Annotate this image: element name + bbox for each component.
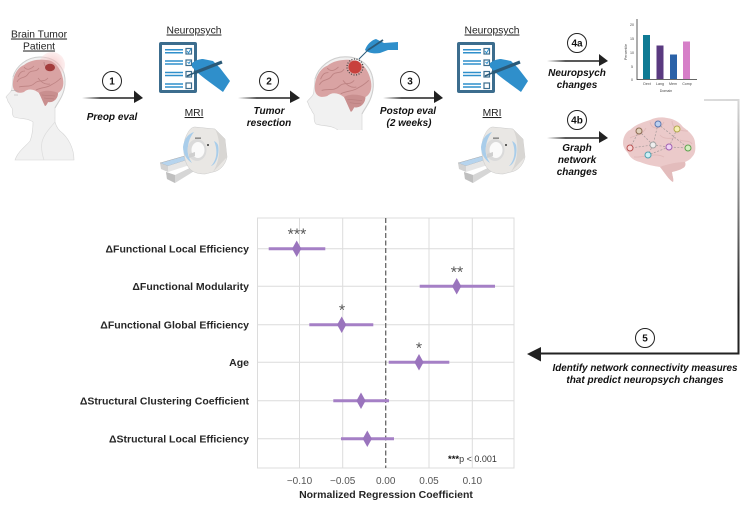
step 4b badge: 4b <box>571 116 583 126</box>
mini bar chart: neuropsych changes by domain: 15 <box>630 37 634 41</box>
heading: MRI postop: MRI <box>483 108 501 119</box>
mini bar chart: neuropsych changes by domain: Lang <box>656 82 664 86</box>
step 2 label: Tumor <box>254 106 286 117</box>
mini bar chart: neuropsych changes by domain: 5 <box>631 65 633 69</box>
zero reference line <box>385 218 387 468</box>
heading: neuropsych preop: Neuropsych <box>167 26 222 36</box>
row: structural clustering coefficient <box>80 392 389 409</box>
step 1 badge: 1 <box>109 76 115 88</box>
mini bar chart: neuropsych changes by domain: Mem <box>669 82 677 86</box>
x axis tick labels: 0.05 <box>419 476 439 487</box>
x axis tick labels: 0.00 <box>376 476 396 487</box>
icon: hand with scalpel <box>359 39 398 59</box>
mini bar chart: neuropsych changes by domain: Percentile <box>624 44 628 60</box>
icon: neuropsych form <box>159 42 230 93</box>
mini bar chart: neuropsych changes by domain: Domain <box>660 89 672 93</box>
step 1 label: Preop eval <box>87 112 138 123</box>
row: age: * <box>416 340 422 358</box>
heading: brain tumor patient: Patient <box>23 42 55 52</box>
row: structural local efficiency: ΔStructural Local Efficiency <box>109 434 249 446</box>
step 4a label: changes <box>557 80 598 91</box>
step 4a arrow <box>547 54 608 66</box>
row: functional global efficiency: * <box>339 302 345 320</box>
x axis title: Normalized Regression Coefficient <box>299 489 473 501</box>
step 1 arrow <box>82 90 143 103</box>
row: functional modularity: ** <box>451 264 463 282</box>
row: functional global efficiency <box>100 302 373 333</box>
icon: neuropsych form postop <box>457 42 528 93</box>
step 5 connector arrow <box>527 100 738 362</box>
row: functional modularity: ΔFunctional Modularity <box>132 281 249 293</box>
row: functional local efficiency: *** <box>288 226 306 244</box>
significance note: ***p < 0.001 <box>448 454 497 465</box>
step 3 badge: 3 <box>407 76 413 88</box>
plot frame and grid <box>257 218 514 468</box>
step 4a label: Neuropsych <box>548 68 606 79</box>
row: functional local efficiency: ΔFunctional Local Efficiency <box>106 244 249 256</box>
step 4b label: network <box>558 155 597 166</box>
icon: head during tumor resection <box>306 39 398 130</box>
icon: brain with graph network <box>623 117 695 182</box>
icon: patient head with tumor <box>6 52 74 160</box>
row: structural clustering coefficient: ΔStructural Clustering Coefficient <box>80 396 249 408</box>
step 5 badge: 5 <box>642 334 648 344</box>
icon: MRI scanner postop <box>458 127 525 183</box>
mini bar chart: neuropsych changes by domain: Comp <box>682 82 692 86</box>
step 3 arrow <box>383 90 443 103</box>
step 3 label: Postop eval <box>380 106 436 117</box>
step 2 label: resection <box>247 118 291 129</box>
x axis tick labels <box>287 476 482 487</box>
mini bar chart: neuropsych changes by domain: Dext <box>643 82 651 86</box>
step 4a badge: 4a <box>571 38 583 50</box>
row: structural local efficiency <box>109 430 394 447</box>
step 2 badge <box>260 72 278 90</box>
step 4b badge <box>568 110 586 130</box>
step 1 badge <box>102 72 122 90</box>
step 4b label <box>557 143 598 178</box>
x axis tick labels: −0.10 <box>287 476 313 487</box>
row: age <box>229 340 449 370</box>
step 2 badge: 2 <box>266 76 272 88</box>
heading: neuropsych postop: Neuropsych <box>465 26 520 36</box>
mini bar chart: neuropsych changes by domain <box>624 19 697 93</box>
step 3 label <box>380 106 436 129</box>
heading: MRI preop: MRI <box>185 108 203 119</box>
step 5 label: that predict neuropsych changes <box>566 375 724 386</box>
step 4b label: changes <box>557 167 598 178</box>
icon: MRI scanner <box>160 127 227 183</box>
forest plot: normalized regression coefficients <box>80 218 514 501</box>
heading: brain tumor patient: Brain Tumor <box>11 30 68 40</box>
row: functional local efficiency <box>106 226 325 257</box>
x axis tick labels: −0.05 <box>330 476 356 487</box>
step 5 label <box>552 363 738 386</box>
step 3 badge <box>400 72 420 90</box>
heading: brain tumor patient <box>11 30 68 52</box>
row: functional global efficiency: ΔFunctional Global Efficiency <box>100 320 249 332</box>
step 2 label <box>247 106 291 129</box>
step 4a label <box>548 68 606 91</box>
mini bar chart: neuropsych changes by domain: 0 <box>631 78 633 82</box>
step 5 badge <box>636 328 654 348</box>
step 3 label: (2 weeks) <box>386 118 432 129</box>
step 4b arrow <box>547 131 608 143</box>
x axis tick labels: 0.10 <box>463 476 482 487</box>
mini bar chart: neuropsych changes by domain: 20 <box>630 23 634 27</box>
row: functional modularity <box>132 264 495 294</box>
step 2 arrow <box>238 90 300 103</box>
row: age: Age <box>229 357 249 369</box>
mini bar chart: neuropsych changes by domain: 10 <box>630 51 634 55</box>
step 5 label: Identify network connectivity measures <box>552 363 738 374</box>
step 4a badge <box>568 34 586 52</box>
step 4b label: Graph <box>562 143 592 154</box>
